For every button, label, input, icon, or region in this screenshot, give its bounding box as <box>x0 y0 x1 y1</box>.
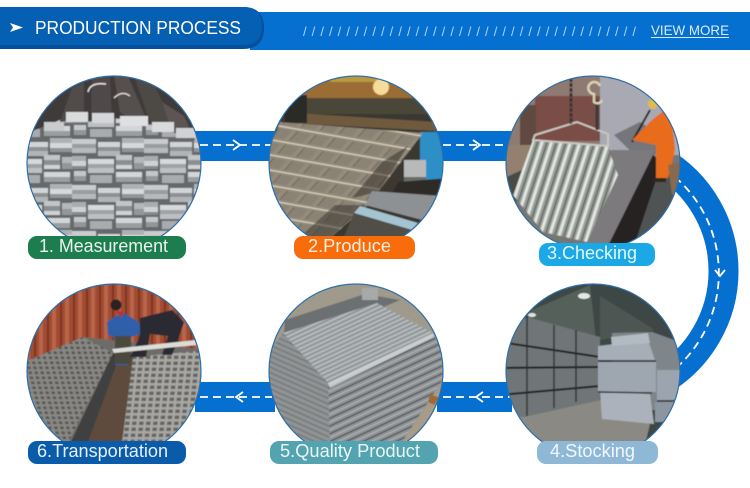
connector: stocking to quality product <box>437 382 512 412</box>
photo: checking galvanised grating <box>505 75 680 243</box>
worker in black <box>130 310 184 357</box>
connector: produce to checking <box>437 131 512 161</box>
photo: finished steel grating <box>268 283 444 441</box>
header bar <box>0 7 750 50</box>
connector: measurement to produce <box>195 131 275 161</box>
photo: warehouse stocking <box>505 283 680 442</box>
icon: header arrow <box>10 23 23 32</box>
label: 3.Checking <box>539 243 655 266</box>
view more link: VIEW MORE <box>651 22 729 38</box>
photo: stacked steel flats <box>26 75 202 236</box>
connector: checking to stocking curved <box>660 161 725 381</box>
photo: loading container <box>26 283 202 441</box>
worker in blue <box>107 300 141 365</box>
label: 4.Stocking: 4.Stocking <box>550 441 635 461</box>
label: 2.Produce: 2.Produce <box>308 236 391 256</box>
photo: grating production <box>268 75 444 236</box>
label: 4.Stocking <box>537 441 658 464</box>
heading: PRODUCTION PROCESS <box>35 18 241 38</box>
connector: quality product to transportation <box>195 382 275 412</box>
label: 1. Measurement: 1. Measurement <box>39 236 168 256</box>
hatch decoration: /////////////////////////////////////// <box>303 24 636 39</box>
label: 2.Produce <box>294 236 415 259</box>
label: 6.Transportation: 6.Transportation <box>37 441 168 461</box>
label: 3.Checking: 3.Checking <box>547 243 637 263</box>
label: 5.Quality Product: 5.Quality Product <box>280 441 420 461</box>
